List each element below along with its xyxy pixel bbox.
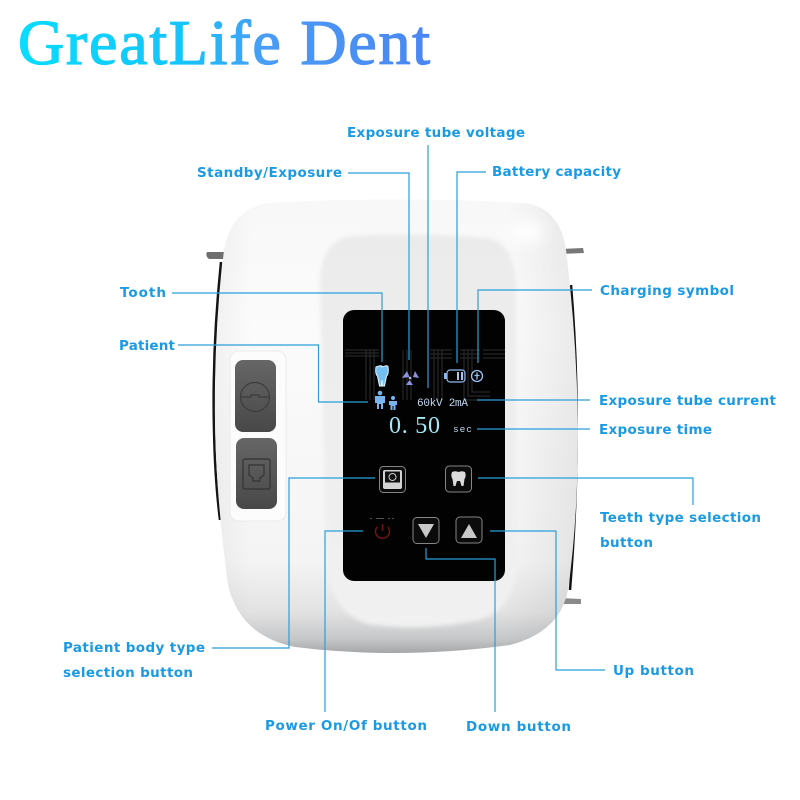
label: patient body type selection button: selection button [63, 665, 193, 681]
icon: battery [444, 370, 465, 382]
mounting pin top left [206, 252, 224, 259]
watermark [345, 350, 505, 400]
power button [370, 518, 394, 538]
label: exposure tube voltage: Exposure tube voltage [347, 125, 525, 141]
label: exposure tube current: Exposure tube current [599, 393, 777, 409]
icon: charging symbol [472, 370, 482, 382]
highlight [511, 221, 543, 243]
title: GreatLife Dent [18, 7, 430, 78]
body side shading [215, 200, 578, 653]
display panel [343, 310, 505, 581]
recessed panel [320, 234, 517, 627]
voltage and current readout: 60kV 2mA [417, 398, 468, 410]
label: patient: Patient [119, 338, 176, 354]
label: tooth: Tooth [120, 285, 166, 301]
label: standby/exposure: Standby/Exposure [197, 165, 342, 181]
label: charging symbol: Charging symbol [600, 283, 734, 299]
mounting pin top right [560, 248, 584, 254]
label: teeth type selection button: button [600, 535, 653, 551]
port top [235, 360, 276, 432]
icon: radiation [402, 371, 419, 385]
down button [413, 518, 439, 544]
label: battery capacity: Battery capacity [492, 164, 621, 180]
teeth type button [446, 466, 472, 492]
label: down button: Down button [466, 719, 571, 735]
icon: patient figures [375, 391, 397, 410]
label: exposure time: Exposure time [599, 422, 712, 438]
dark side edges [214, 262, 221, 520]
device illustration [206, 200, 584, 653]
icon: tooth [376, 366, 388, 386]
callout lines [172, 145, 693, 712]
port cover [230, 351, 286, 521]
up button [456, 517, 482, 543]
patient body type button [380, 466, 406, 492]
mounting pin bottom right [560, 598, 581, 604]
label: power on/of button: Power On/Of button [265, 718, 427, 734]
label: up button: Up button [613, 663, 694, 679]
label: teeth type selection button: Teeth type selection [600, 510, 761, 526]
label: patient body type selection button: Patient body type [63, 640, 205, 656]
exposure time unit: sec [453, 424, 472, 435]
device body [215, 200, 578, 653]
exposure time value: 0. 50 [389, 413, 440, 439]
port bottom [236, 438, 277, 509]
